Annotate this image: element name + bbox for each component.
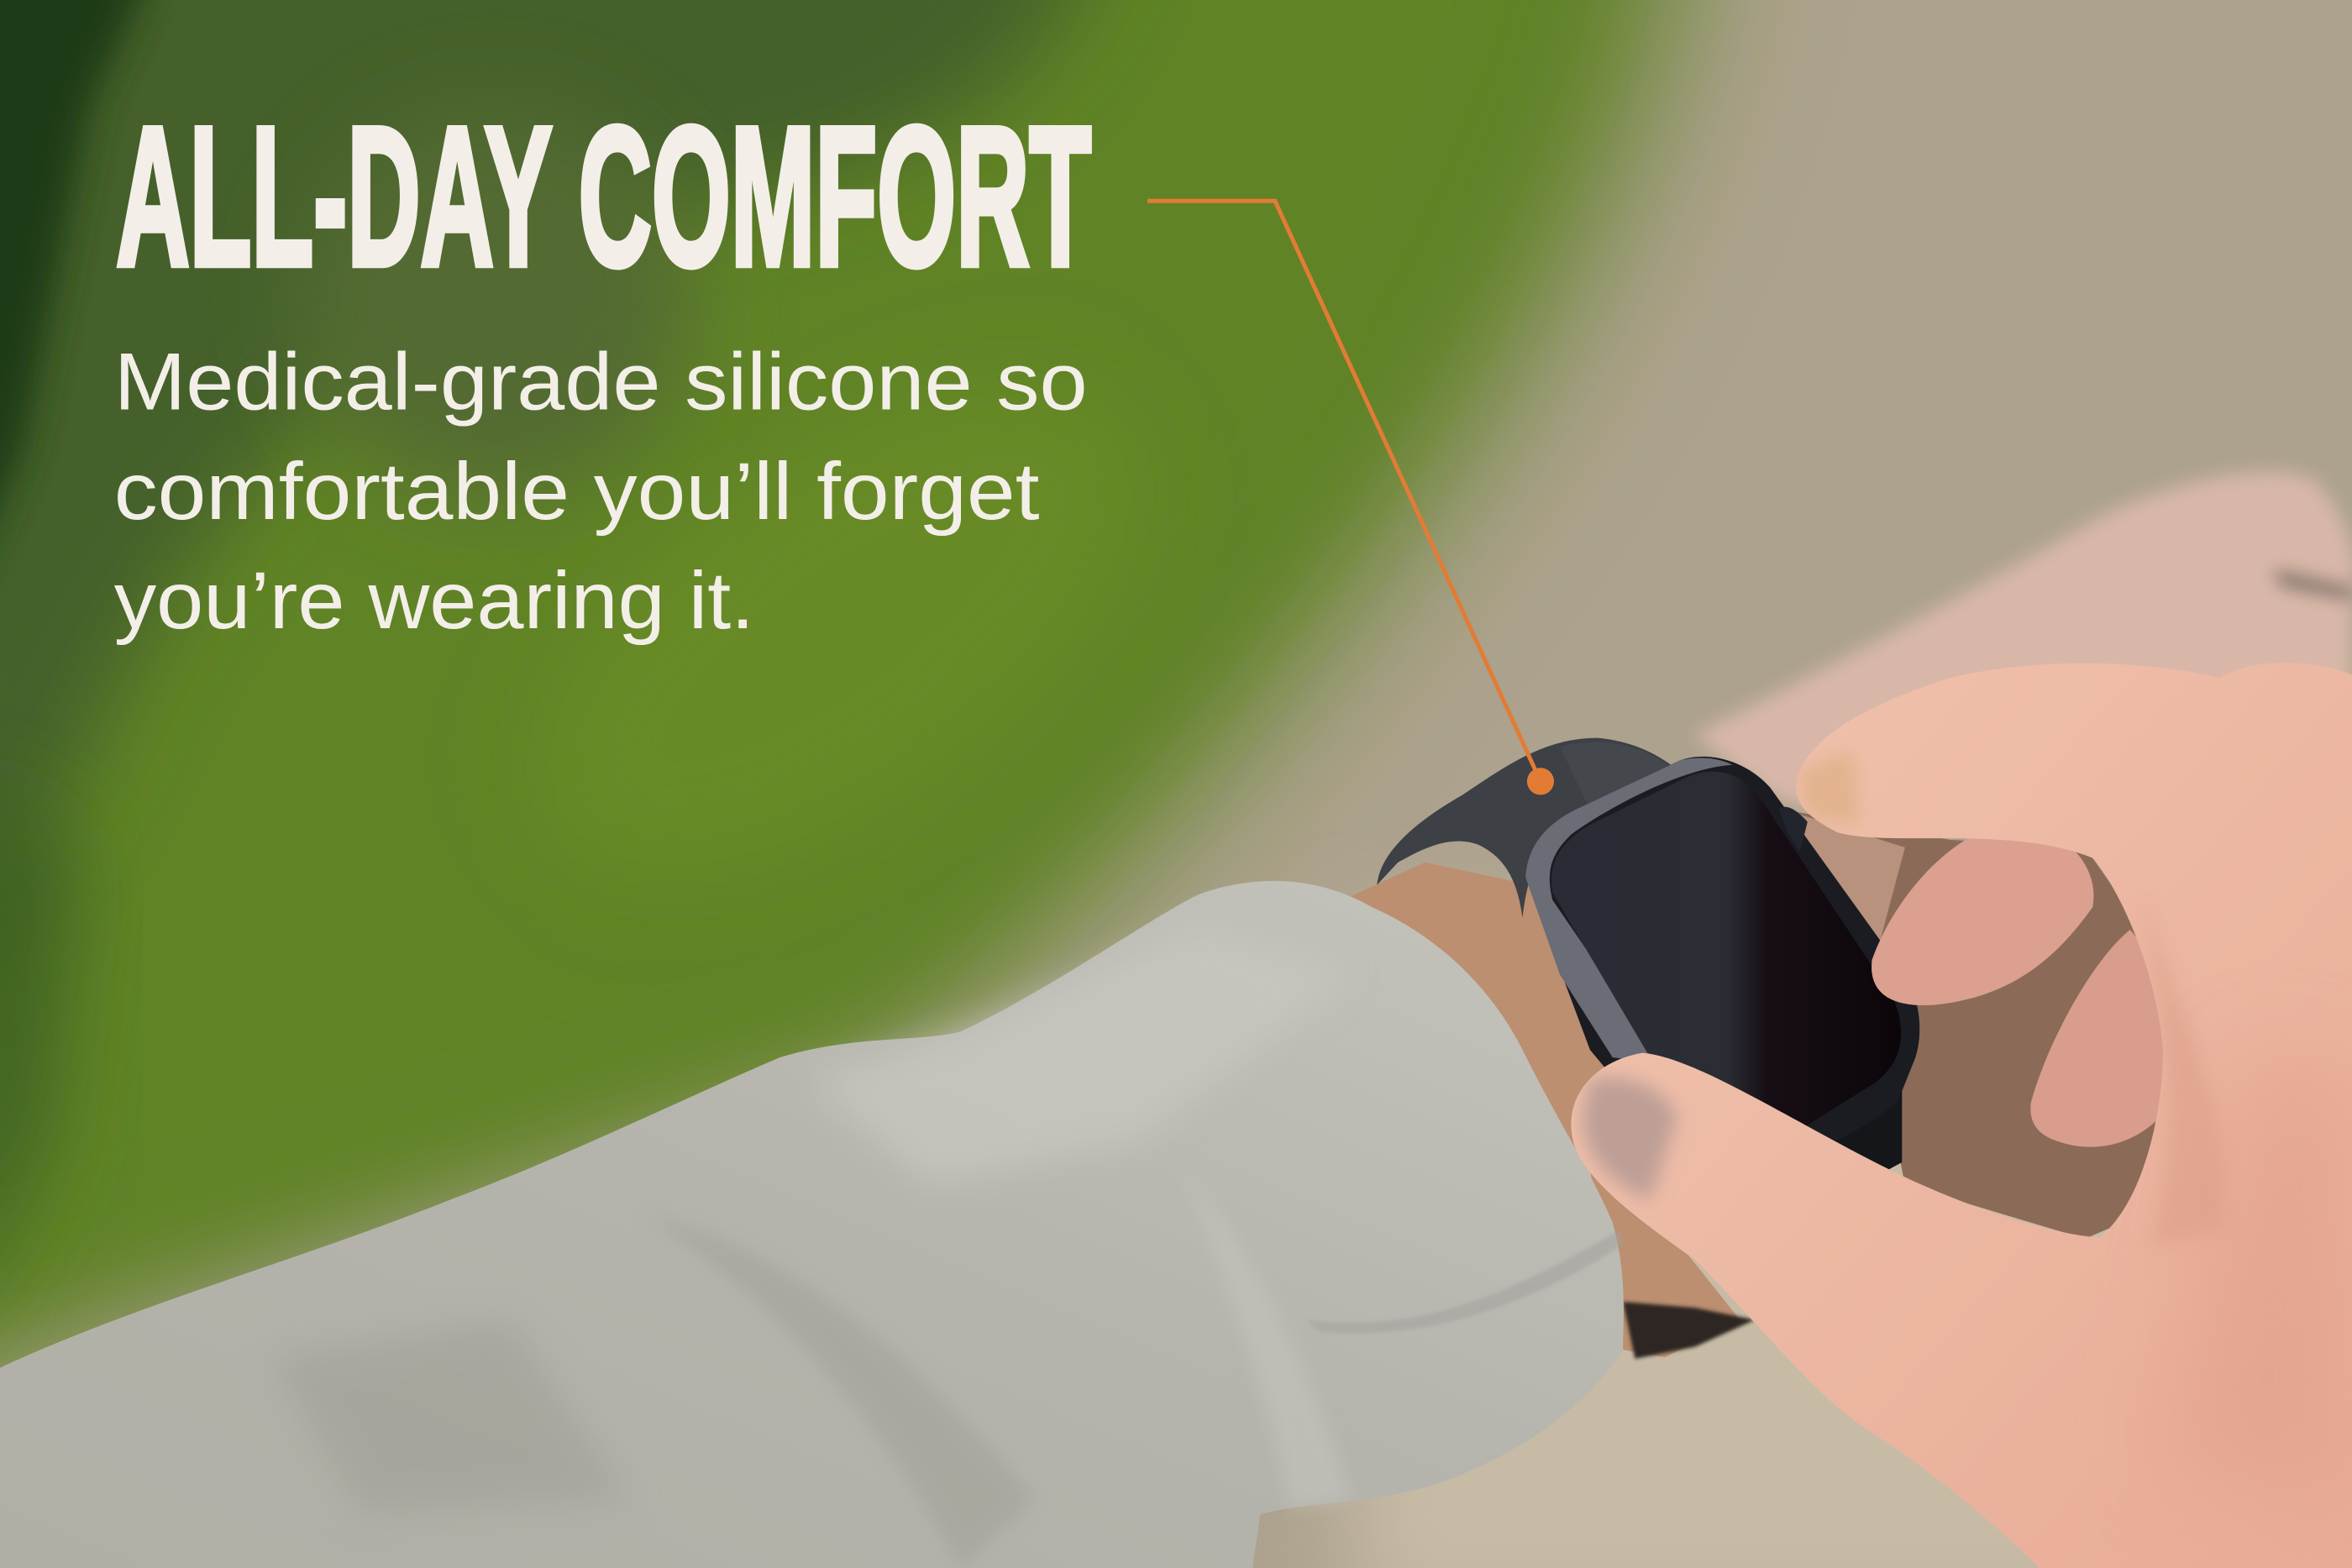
watch: case, crown and screen bbox=[1525, 757, 1919, 1177]
body text bbox=[114, 338, 1088, 646]
hand: index finger, thumb and palm bbox=[1571, 663, 2352, 1568]
sleeve: light grey linen shirt sleeve bbox=[0, 881, 1624, 1568]
body text: you’re wearing it. bbox=[114, 556, 754, 646]
back hand: blurred far hand and forearm bbox=[1695, 472, 2352, 810]
body text: Medical-grade silicone so bbox=[114, 338, 1088, 427]
wrist: hairy forearm skin bbox=[1342, 863, 1755, 1359]
callout: orange leader line and dot on band bbox=[1147, 201, 1554, 794]
back of hand: shadowed area between fingers bbox=[1785, 810, 2175, 1239]
title: ALL-DAY COMFORT bbox=[116, 86, 1091, 307]
middle and ring fingers bbox=[1872, 822, 2166, 1147]
body text: comfortable you’ll forget bbox=[114, 447, 1040, 537]
watch band: dark silicone strap bbox=[1377, 738, 1902, 1185]
